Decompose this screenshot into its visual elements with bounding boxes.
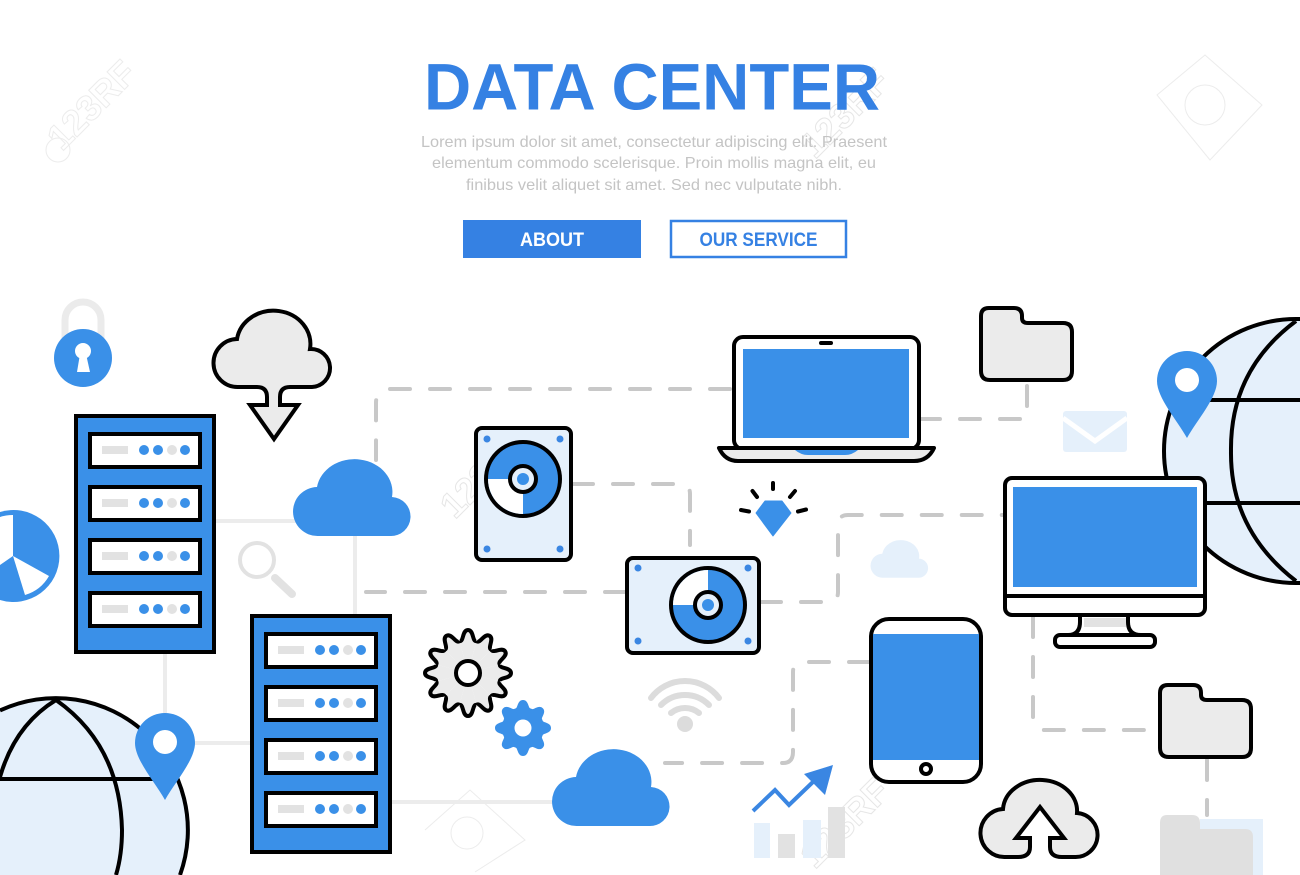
icon: blue cloud bottom (552, 749, 670, 826)
solid connector lines (165, 521, 555, 802)
button: about: ABOUT (520, 230, 584, 251)
icon: smartphone (871, 619, 981, 782)
button: our service (671, 221, 846, 257)
icon: faint cloud (871, 540, 928, 578)
intro paragraph: Lorem ipsum dolor sit amet, consectetur adipiscing elit. Praesent (421, 134, 888, 151)
icon: magnifier (240, 543, 292, 594)
icon: faded folder bottom right (1160, 815, 1263, 875)
intro paragraph (421, 134, 888, 194)
intro paragraph: finibus velit aliquet sit amet. Sed nec vulputate nibh. (466, 177, 842, 194)
icon: cloud download (213, 311, 330, 439)
icon: hard drive vertical (476, 428, 571, 560)
icon: diamond with rays (741, 483, 806, 536)
icon: folder top (981, 308, 1072, 380)
icon: globe left (0, 698, 188, 875)
icon: folder right (1160, 685, 1251, 757)
title: DATA CENTER (424, 50, 880, 124)
icon: small blue gear (495, 700, 551, 756)
icon: mail envelope (1063, 411, 1127, 452)
watermarks: 123RF (57, 768, 162, 874)
icon: location pin left (135, 713, 195, 800)
icon: location pin right (1157, 351, 1217, 438)
button: our service: OUR SERVICE (700, 230, 818, 251)
icon: blue cloud top (293, 459, 411, 536)
watermarks: 123RF (39, 52, 144, 158)
watermarks: 123RF (792, 60, 897, 166)
icon: laptop (719, 337, 934, 461)
dashed connector lines (366, 382, 1207, 815)
icon: padlock (54, 302, 112, 387)
icon: desktop monitor (1005, 478, 1205, 647)
watermarks: 123RF (792, 770, 897, 875)
icon: globe right (1164, 319, 1300, 583)
chart: growth arrow with bars (753, 765, 845, 858)
icon: wifi (651, 681, 719, 732)
server rack left (76, 416, 214, 652)
icon: pie chart (0, 510, 59, 602)
watermarks: 123RF (432, 420, 537, 526)
icon: hard drive horizontal (627, 558, 759, 653)
icon: cloud upload (980, 780, 1098, 857)
button: about (463, 220, 641, 258)
icon: large gear (425, 630, 511, 716)
server rack center (252, 616, 390, 852)
intro paragraph: elementum commodo scelerisque. Proin mollis magna elit, eu (432, 155, 876, 172)
